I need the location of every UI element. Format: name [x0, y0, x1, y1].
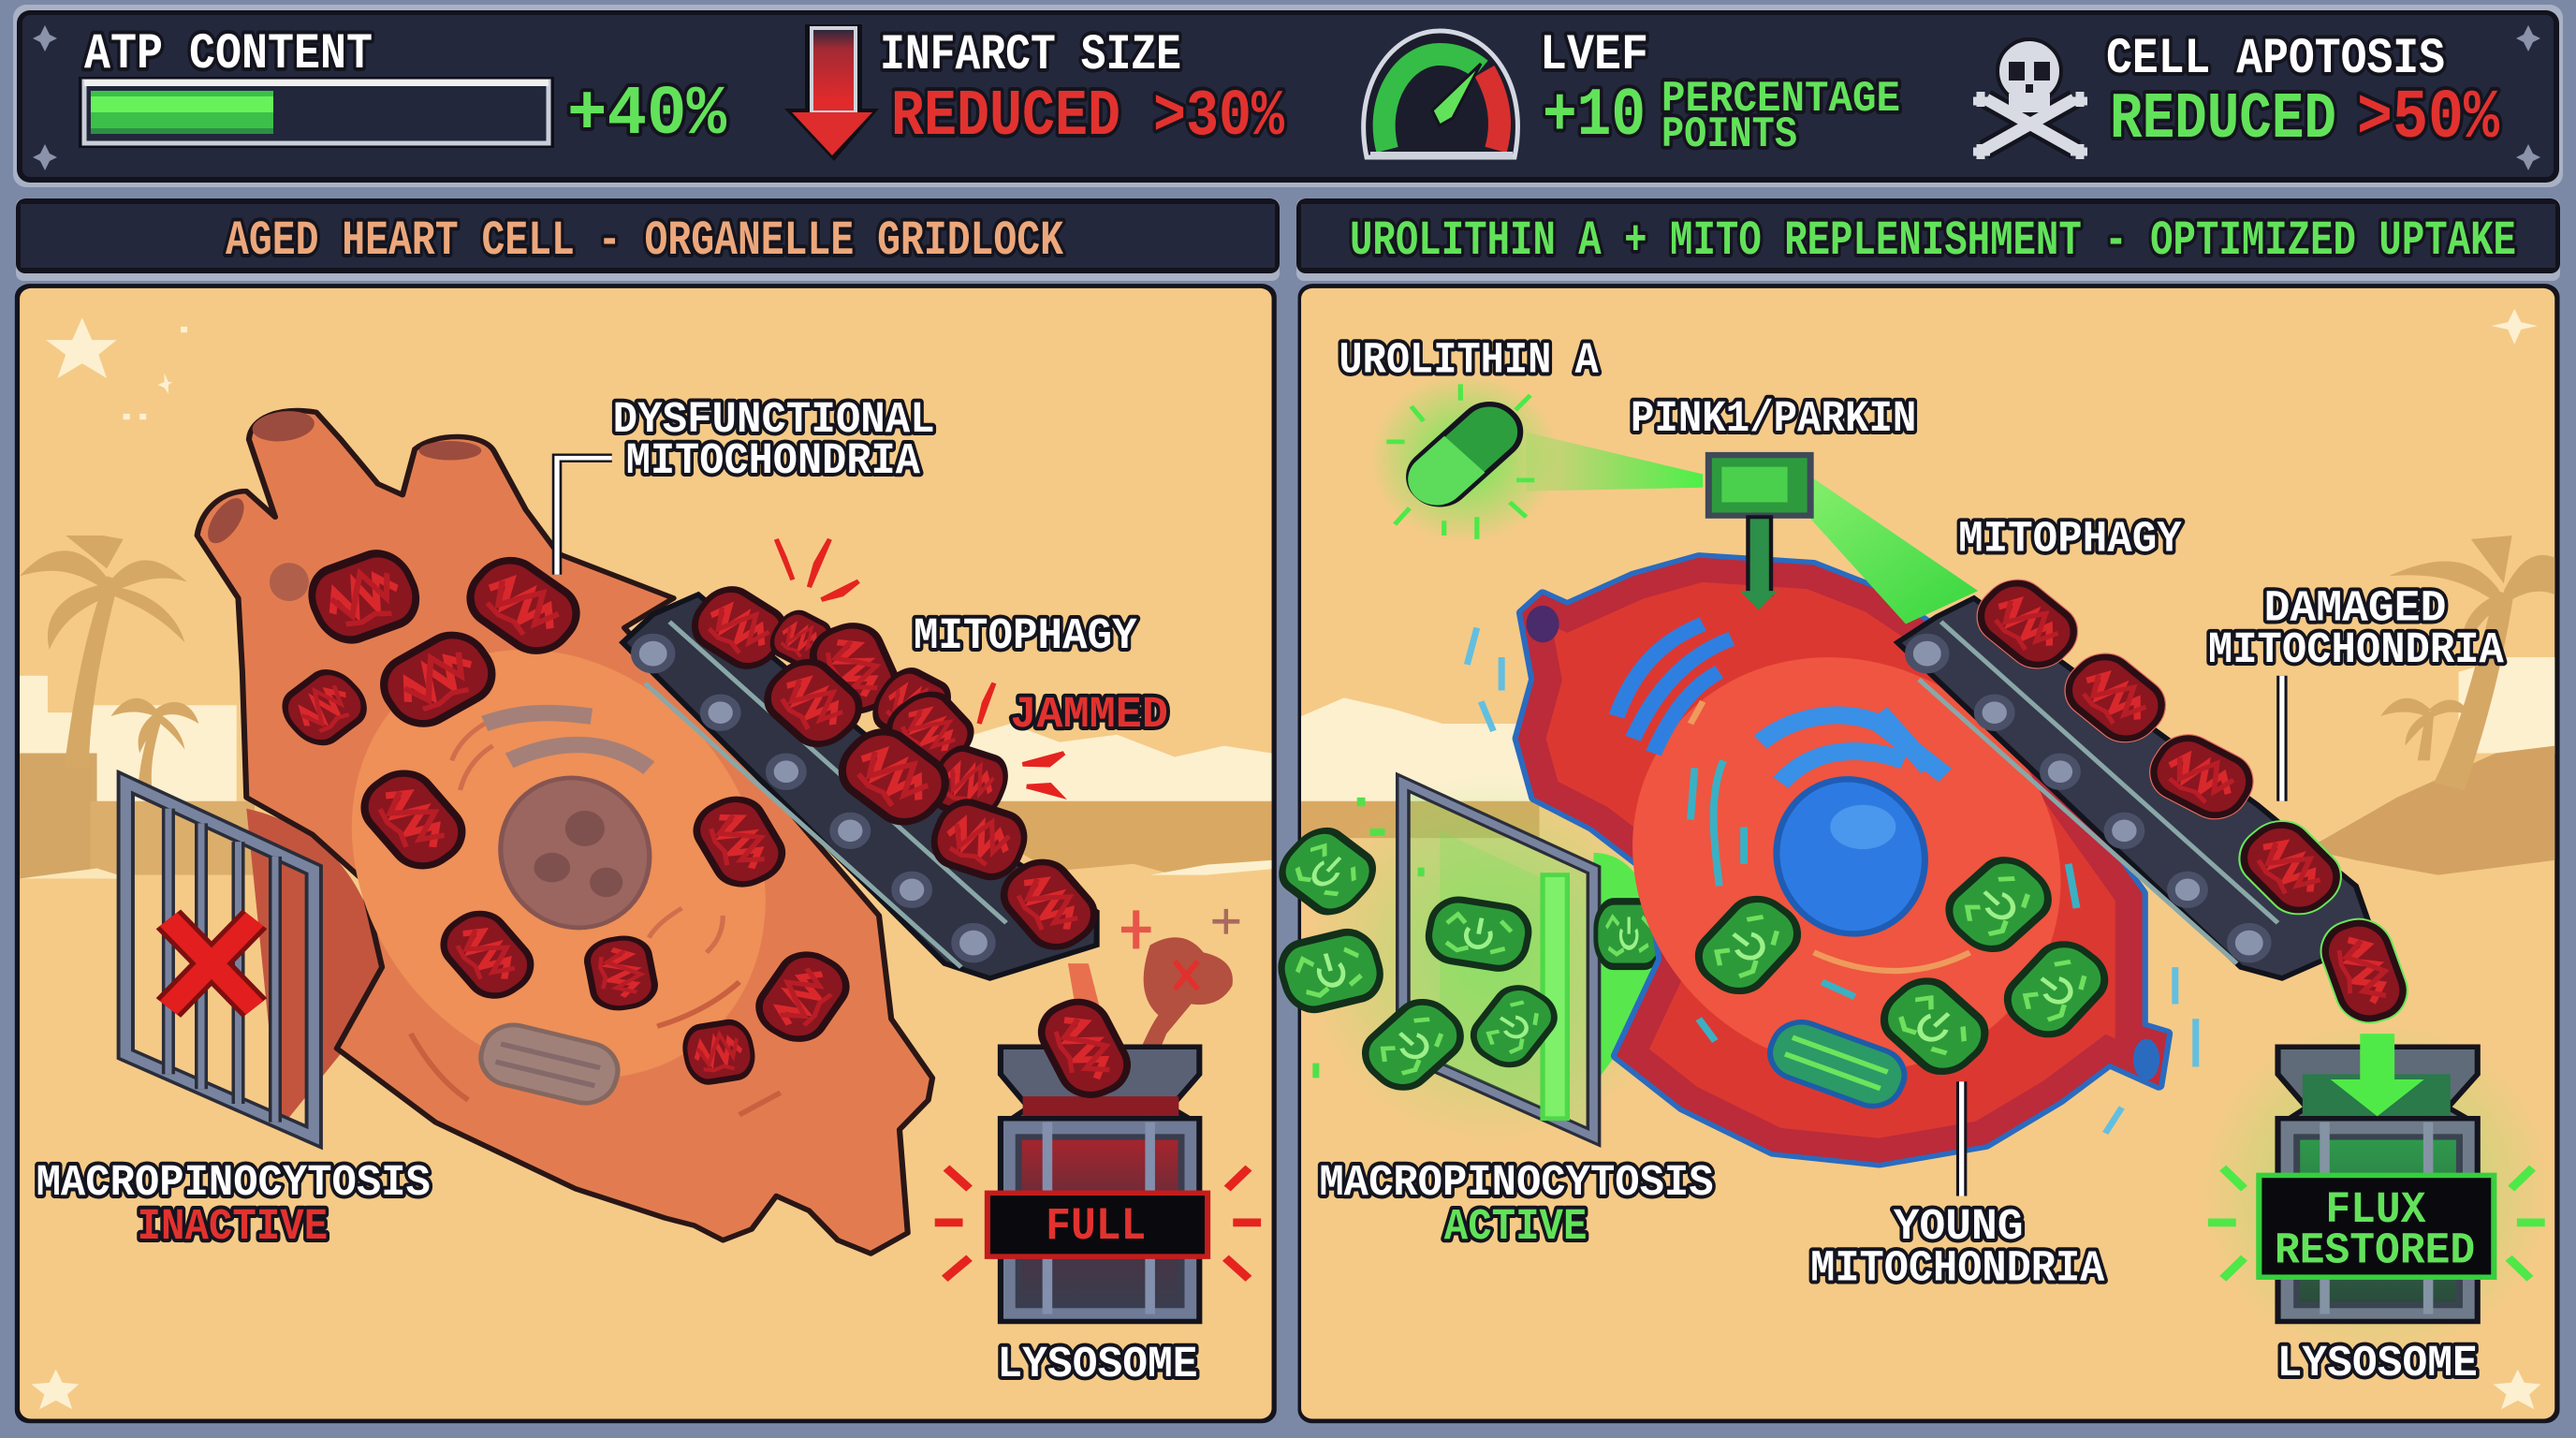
stat: cell apoptosis [1973, 31, 2499, 159]
sparkles in stats bar [33, 25, 2540, 170]
labels right: MITOPHAGY [1958, 515, 2182, 565]
labels right: PINK1/PARKIN [1631, 394, 1916, 445]
jammed conveyor belt [622, 580, 1105, 978]
labels right: MACROPINOCYTOSIS [1319, 1158, 1714, 1209]
young cell body [1518, 558, 2167, 1163]
stat: LVEF gauge: LVEF [1540, 27, 1648, 84]
labels left: JAMMED [1010, 690, 1168, 741]
labels left: MACROPINOCYTOSIS [37, 1158, 431, 1209]
lysosome flux restored: RESTORED [2275, 1226, 2475, 1277]
smoke and lysosome full: FULL [1046, 1201, 1146, 1253]
lysosome flux restored [2200, 1019, 2554, 1358]
sparkles and stars [31, 317, 187, 1409]
beach backdrop right [1301, 309, 2554, 1409]
teal mitochondrion [1762, 1014, 1913, 1114]
leader line [557, 458, 612, 575]
damaged mitochondria on belt [1969, 573, 2411, 1025]
stats bar panel [13, 5, 2563, 187]
stat: LVEF gauge: POINTS [1661, 110, 1797, 159]
pink1 parkin switch [1708, 455, 1978, 624]
stat: ATP content: +40% [567, 76, 727, 154]
labels left: INACTIVE [138, 1202, 328, 1253]
conveyor belt [1897, 598, 2374, 978]
smoke and lysosome full [935, 909, 1261, 1322]
labels right: ACTIVE [1444, 1202, 1587, 1253]
labels left: LYSOSOME [997, 1340, 1198, 1390]
urolithin pill and beam [1370, 374, 1703, 543]
stat: infarct size: REDUCED >30% [891, 81, 1285, 154]
header: left panel title [16, 198, 1280, 281]
lysosome flux restored: FLUX [2325, 1185, 2426, 1236]
nucleus [485, 766, 665, 940]
labels right: UROLITHIN A [1339, 336, 1600, 387]
panel: aged heart cell [15, 284, 1277, 1423]
stat: ATP content [79, 26, 727, 154]
stat: cell apoptosis: CELL APOTOSIS [2106, 31, 2445, 88]
labels right: YOUNG [1894, 1202, 2023, 1253]
labels left: MITOPHAGY [914, 611, 1137, 662]
panel: urolithin A treated cell [1271, 284, 2560, 1423]
labels left: MITOCHONDRIA [626, 436, 921, 487]
stat: LVEF gauge [1364, 27, 1900, 159]
golgi and ER blue [1617, 624, 1732, 754]
labels left [37, 395, 1198, 1390]
nucleus blue [1765, 770, 1936, 943]
macropinocytosis portal active [1271, 775, 1682, 1144]
stat: cell apoptosis: >50% [2357, 80, 2499, 158]
stat: infarct size [784, 24, 1285, 161]
heart cell body [198, 408, 932, 1254]
palms [20, 536, 198, 790]
dysfunctional mitochondria [275, 545, 856, 1085]
labels left: DYSFUNCTIONAL [613, 395, 935, 446]
water sparks [1467, 628, 2196, 1133]
header: left panel title: AGED HEART CELL - ORGANELLE GRIDLOCK [226, 213, 1064, 269]
stat: LVEF gauge: +10 [1543, 78, 1646, 154]
macropinocytosis cage inactive [125, 783, 385, 1137]
header: right panel title [1296, 198, 2560, 281]
stat: LVEF gauge: PERCENTAGE [1661, 75, 1900, 124]
beach backdrop [20, 317, 1272, 1409]
grey mitochondrion [474, 1019, 624, 1109]
labels right: MITOCHONDRIA [1810, 1244, 2105, 1294]
pointer lines [1962, 676, 2282, 1196]
labels right: LYSOSOME [2277, 1339, 2478, 1389]
stat: infarct size: INFARCT SIZE [880, 27, 1181, 84]
labels right: DAMAGED [2264, 584, 2446, 635]
labels right: MITOCHONDRIA [2208, 625, 2505, 676]
stat: ATP content: ATP CONTENT [84, 26, 373, 83]
jam sparks [776, 539, 1063, 795]
stat: cell apoptosis: REDUCED [2110, 83, 2336, 157]
golgi [485, 713, 649, 768]
labels right [1319, 336, 2505, 1389]
